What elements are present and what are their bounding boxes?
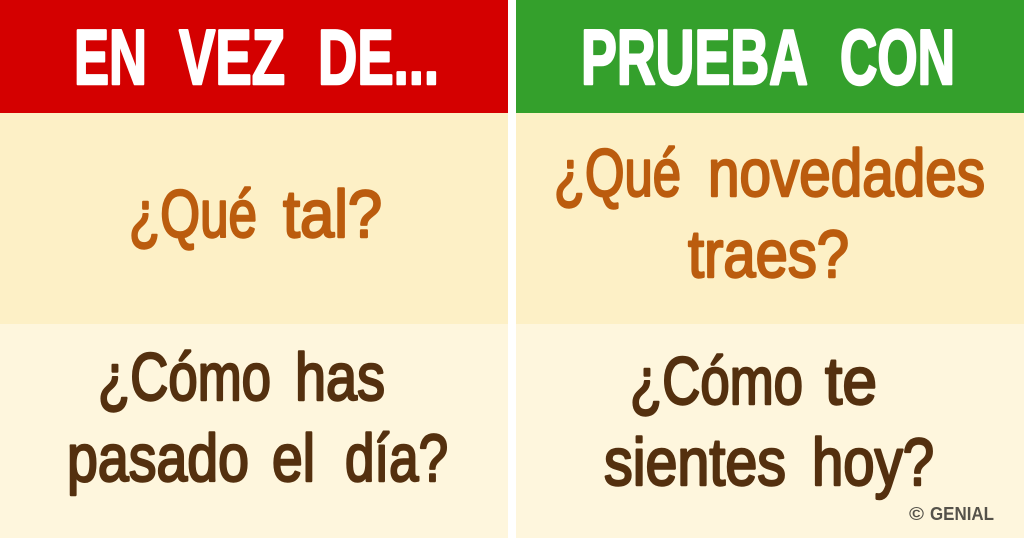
panel: left row two	[0, 324, 508, 538]
heading: en vez de: EN	[74, 13, 147, 101]
panel: left row one	[0, 113, 508, 324]
text: como has pasado el dia: has	[295, 340, 385, 415]
credit: genial: GENIAL	[930, 504, 994, 524]
text: como has pasado el dia: ¿Cómo	[98, 340, 271, 415]
text: como has pasado el dia: pasado	[67, 421, 249, 496]
text: como te sientes hoy: sientes	[604, 425, 786, 500]
heading: prueba con: CON	[840, 13, 955, 101]
text: que tal	[129, 177, 382, 252]
heading: en vez de: DE...	[318, 13, 439, 101]
text: como has pasado el dia: el	[272, 421, 315, 496]
heading: prueba con: PRUEBA	[581, 13, 808, 101]
panel: right row two	[516, 324, 1024, 538]
text: que novedades traes: ¿Qué	[554, 136, 681, 211]
credit: genial: ©	[909, 504, 924, 524]
heading: en vez de: VEZ	[179, 13, 285, 101]
heading: en vez de	[74, 13, 439, 101]
text: como has pasado el dia	[67, 340, 448, 496]
text: que tal: ¿Qué	[129, 177, 257, 252]
text: como te sientes hoy: te	[825, 344, 877, 419]
panel: left header	[0, 0, 508, 113]
text: que tal: tal?	[283, 177, 382, 252]
text: como te sientes hoy	[604, 344, 934, 500]
text: que novedades traes: traes?	[688, 217, 849, 292]
text: como has pasado el dia: día?	[345, 421, 448, 496]
panel: right row one	[516, 113, 1024, 324]
text: como te sientes hoy: hoy?	[812, 425, 934, 500]
panel: right header	[516, 0, 1024, 113]
text: como te sientes hoy: ¿Cómo	[630, 344, 803, 419]
text: que novedades traes	[554, 136, 985, 292]
